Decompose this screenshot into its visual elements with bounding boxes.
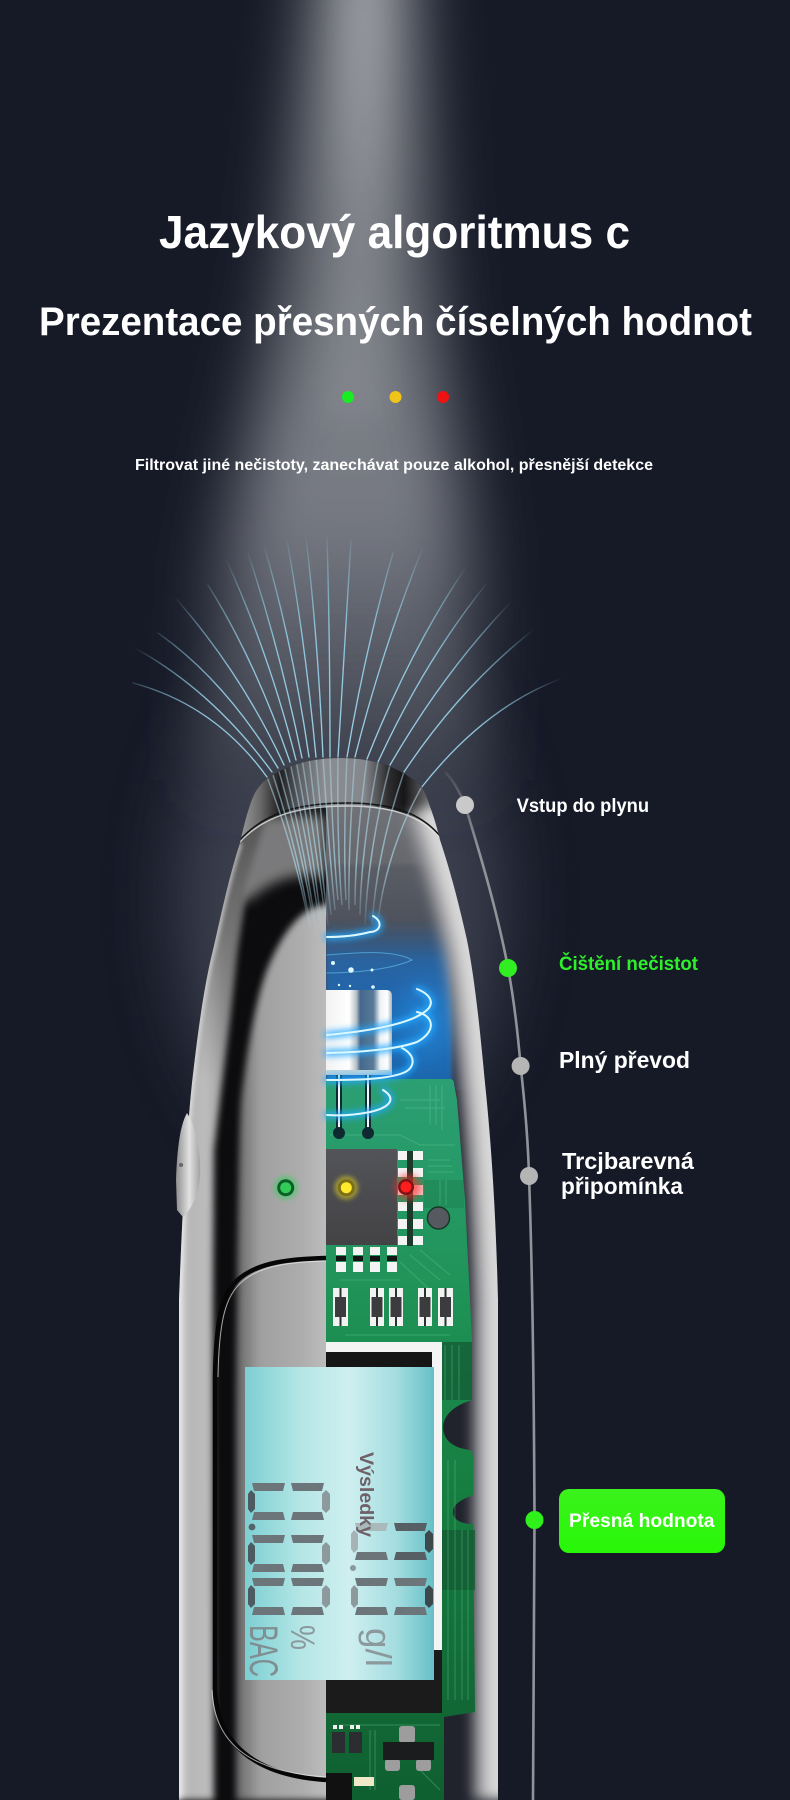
label: three colour reminder: připomínka: [561, 1173, 684, 1199]
node: impurity cleaning: [499, 959, 517, 977]
vysledky label: Výsledky: [355, 1452, 376, 1537]
right half upper translucent area: [326, 800, 468, 1090]
PCB board: [326, 1079, 475, 1800]
connecting wire: [212, 1258, 326, 1780]
node: exact value: [526, 1511, 544, 1529]
sensor can: [326, 990, 392, 1075]
LCD frame and backing: [326, 1342, 442, 1713]
title line 1: Jazykový algoritmus c: [159, 206, 630, 258]
right edge light rim: [430, 807, 498, 1800]
centre silver hump: [236, 905, 340, 1800]
digit 5: [351, 1578, 433, 1615]
PCB traces: [330, 1085, 468, 1790]
left half shell: [179, 758, 326, 1800]
LED green: [274, 1176, 298, 1200]
subtitle: Filtrovat jiné nečistoty, zanechávat pouze alkohol, přesnější detekce: [135, 457, 653, 474]
node: full conversion: [512, 1057, 530, 1075]
swirl halo: [327, 916, 431, 1115]
side button: [176, 1113, 200, 1217]
sensor pins: [333, 1075, 374, 1139]
unit percent: %: [283, 1625, 321, 1650]
unit BAC: BAC: [241, 1625, 285, 1677]
resistor components: [333, 1288, 453, 1326]
label: impurity cleaning: Čištění nečistot: [559, 951, 698, 975]
sparks: [331, 961, 375, 989]
cap seam: [240, 806, 440, 842]
digit 4: [351, 1523, 433, 1560]
air flow lines: [133, 537, 575, 788]
unit g per litre: g/l: [358, 1628, 399, 1667]
badge: exact value: [559, 1489, 725, 1553]
inner air flow lines: [267, 757, 421, 935]
LED yellow: [334, 1176, 358, 1200]
right half base: [329, 758, 470, 1800]
PCB darker bands: [424, 1180, 475, 1590]
digit 3: [248, 1578, 330, 1615]
label: three colour reminder: Trcjbarevná: [562, 1148, 695, 1174]
badge: exact value: Přesná hodnota: [569, 1510, 715, 1532]
left edge light rim: [179, 843, 240, 1800]
light beam: [175, 0, 505, 1170]
decimal points: [249, 1524, 356, 1571]
glowing swirl: [327, 916, 431, 1115]
chip: [326, 1149, 397, 1245]
lower PCB components: [326, 1725, 434, 1800]
chip bottom pads: [336, 1247, 397, 1272]
below seam grey zone: [232, 815, 326, 900]
right half blue zone: [326, 920, 452, 1090]
device body: [170, 750, 506, 1800]
digit 2: [248, 1535, 330, 1572]
faint ring: [327, 953, 412, 973]
node: gas inlet: [456, 796, 474, 814]
LCD screen: [241, 1367, 434, 1680]
indicator dots: [342, 391, 449, 403]
LED red: [395, 1174, 421, 1200]
title line 2: Prezentace přesných číselných hodnot: [39, 300, 752, 344]
callout connector line: [445, 772, 534, 1800]
chip right pads: [398, 1151, 423, 1246]
round capacitor: [428, 1207, 450, 1229]
label: gas inlet: Vstup do plynu: [517, 795, 649, 817]
digit 1: [248, 1483, 330, 1520]
swirl core: [327, 916, 431, 1115]
left silver strip: [170, 815, 268, 1800]
node: three colour reminder: [520, 1167, 538, 1185]
label: full conversion: Plný převod: [559, 1047, 690, 1073]
cap: [241, 758, 439, 838]
silver strip upper dimming: [198, 818, 270, 1054]
